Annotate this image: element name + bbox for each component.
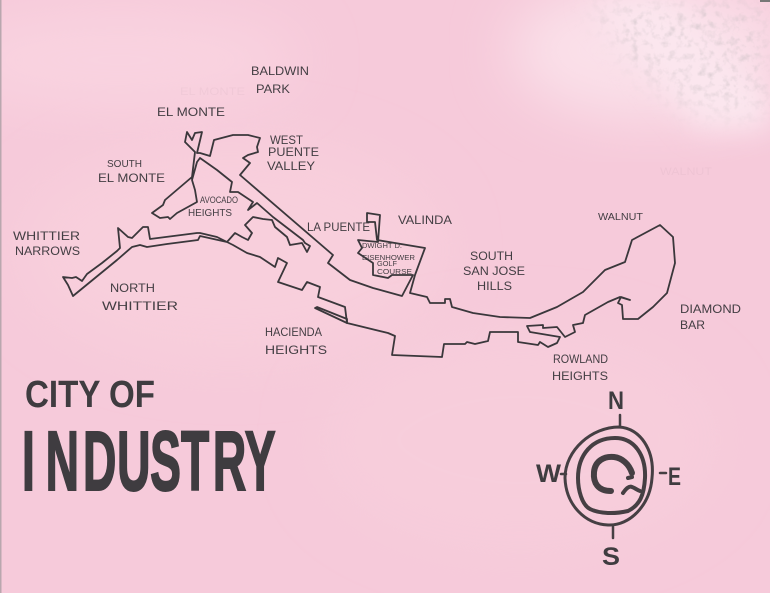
neighbourhood labels: GOLF [377, 261, 397, 268]
map: city boundary outline [63, 132, 675, 357]
neighbourhood labels: NORTH [110, 281, 155, 295]
neighbourhood labels [13, 64, 741, 383]
ghost text showing through paper [180, 86, 712, 178]
title: INDUSTRY [22, 416, 276, 509]
title: CITY OF [25, 374, 155, 416]
neighbourhood labels: HEIGHTS [552, 369, 608, 383]
cardinal ticks [561, 415, 666, 538]
neighbourhood labels: BAR [680, 318, 705, 332]
compass letters: W [536, 460, 561, 488]
outer ring [565, 427, 652, 525]
neighbourhood labels: HACIENDA [265, 325, 322, 339]
neighbourhood labels: PUENTE [268, 145, 319, 159]
neighbourhood labels: BALDWIN [251, 64, 309, 78]
neighbourhood labels: WALNUT [598, 212, 643, 223]
neighbourhood labels: EL MONTE [98, 171, 165, 185]
neighbourhood labels: AVOCADO [200, 195, 238, 205]
neighbourhood labels: WEST [270, 133, 304, 147]
ghost text showing through paper: EL MONTE [180, 86, 245, 98]
neighbourhood labels: VALINDA [398, 213, 452, 227]
neighbourhood labels: NARROWS [15, 244, 80, 258]
neighbourhood labels: LA PUENTE [307, 220, 370, 234]
compass letters: E [668, 463, 681, 491]
compass letters: N [608, 387, 624, 415]
compass letters [536, 387, 681, 571]
neighbourhood labels: SOUTH [470, 249, 513, 263]
neighbourhood labels: ROWLAND [553, 352, 608, 366]
neighbourhood labels: HILLS [477, 279, 512, 293]
neighbourhood labels: DIAMOND [680, 302, 741, 316]
neighbourhood labels: DWIGHT D. [362, 241, 402, 250]
neighbourhood labels: EISENHOWER [362, 253, 416, 262]
compass letters: S [602, 543, 620, 571]
ghost text showing through paper: WALNUT [660, 166, 712, 178]
neighbourhood labels: EL MONTE [157, 105, 225, 119]
inner spiral [594, 457, 632, 491]
neighbourhood labels: HEIGHTS [265, 343, 327, 357]
neighbourhood labels: HEIGHTS [188, 208, 232, 219]
neighbourhood labels: SAN JOSE [463, 264, 525, 278]
neighbourhood labels: PARK [256, 82, 290, 96]
neighbourhood labels: COURSE [377, 267, 412, 276]
neighbourhood labels: SOUTH [107, 159, 142, 170]
neighbourhood labels: WHITTIER [102, 299, 178, 313]
neighbourhood labels: WHITTIER [13, 229, 80, 243]
compass rose [561, 415, 666, 538]
title [22, 374, 276, 509]
middle ring [578, 438, 645, 513]
neighbourhood labels: VALLEY [267, 159, 315, 173]
